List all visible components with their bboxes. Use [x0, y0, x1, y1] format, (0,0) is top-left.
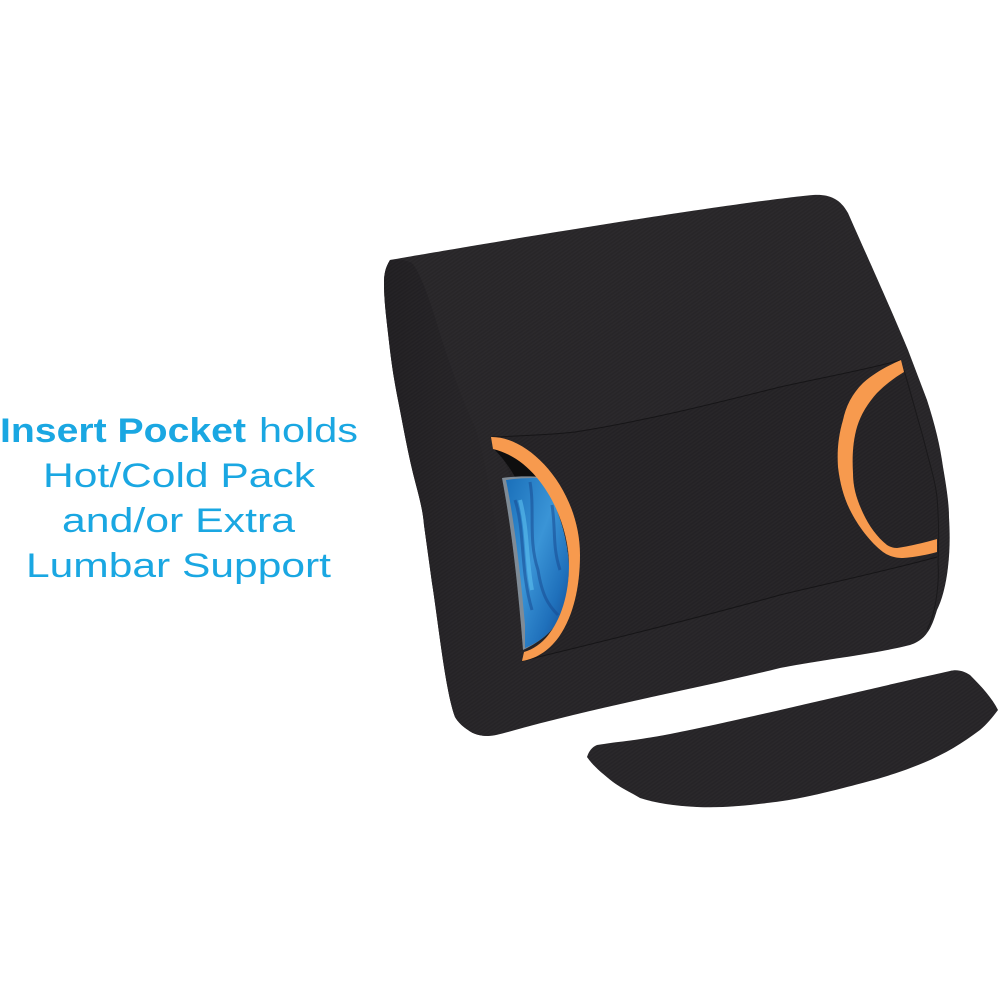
right pocket orange trim [838, 360, 937, 558]
text block: insert pocket caption: holds [259, 412, 358, 450]
text block: insert pocket caption: Insert Pocket [0, 412, 246, 450]
text block: insert pocket caption: Lumbar Support [26, 547, 332, 585]
cushion body [384, 195, 950, 736]
text block: insert pocket caption: and/or Extra [62, 502, 295, 540]
gel pack clear edge [502, 476, 569, 650]
pocket panel [492, 360, 938, 661]
gel pack folds [515, 482, 560, 615]
pocket top seam [492, 360, 901, 437]
fabric mesh texture [384, 195, 950, 736]
extra lumbar support insert [587, 670, 998, 807]
right side seam [904, 370, 939, 630]
icon: hot cold gel pack [502, 476, 569, 650]
text block: insert pocket caption: Hot/Cold Pack [43, 457, 316, 495]
pocket bottom seam [522, 557, 937, 661]
gel pack blue fill [506, 478, 569, 648]
cushion side panel [384, 260, 518, 736]
gel pack highlight [520, 500, 532, 590]
text block: insert pocket caption [0, 412, 358, 585]
left pocket orange trim [491, 437, 580, 661]
left pocket opening [494, 449, 550, 492]
lumbar cushion [384, 195, 950, 736]
insert mesh texture [587, 670, 998, 807]
